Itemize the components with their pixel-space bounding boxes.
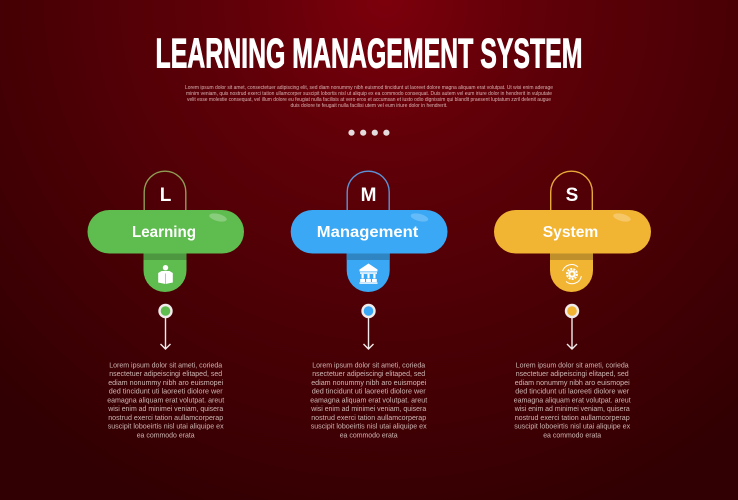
lower tab	[550, 250, 593, 292]
description text: wisi enim ad minimei veniam, quisera	[514, 404, 630, 413]
lower tab	[347, 250, 390, 292]
subtitle text block	[185, 85, 553, 109]
description text: ea commodo erata	[137, 430, 195, 440]
description text: Lorem ipsum dolor sit ameti, corieda	[516, 360, 629, 370]
label bar	[88, 210, 244, 254]
letter tab outline: L	[144, 171, 186, 212]
lower tab	[144, 250, 186, 292]
connector node	[158, 304, 173, 318]
description text	[107, 360, 225, 440]
description text: Lorem ipsum dolor sit ameti, corieda	[312, 360, 426, 370]
description text	[514, 360, 632, 440]
panel: Management	[291, 171, 448, 439]
description text: suscipit loboeirtis nisl utai aliquipe ex	[514, 422, 630, 431]
description text: ded tincidunt uti laoreeti diolore wer	[312, 387, 426, 396]
letter tab outline: S	[551, 171, 592, 212]
description text: wisi enim ad minimei veniam, quisera	[107, 404, 224, 413]
description text: eamagna aliquam erat volutpat. areut	[107, 396, 225, 404]
description text: ea commodo erata	[340, 430, 398, 440]
letter M: M	[361, 185, 376, 206]
label: System: System	[543, 224, 598, 241]
description text: eamagna aliquam erat volutpat. areut	[514, 396, 632, 404]
icon: gear cycle	[563, 265, 581, 284]
description text	[310, 360, 428, 440]
description text: ediam nonummy nibh aro euismopei	[311, 378, 426, 387]
letter L: L	[160, 185, 172, 206]
arrow	[567, 318, 577, 349]
tab shadow	[347, 253, 390, 260]
panel: System	[494, 171, 651, 439]
icon: reader with book	[158, 265, 173, 284]
arrow	[160, 318, 170, 349]
description text: eamagna aliquam erat volutpat. areut	[310, 396, 428, 404]
description text: wisi enim ad minimei veniam, quisera	[310, 404, 427, 413]
letter S: S	[566, 185, 578, 206]
description text: nsectetuer adipeiscingi elitaped, sed	[516, 369, 629, 378]
description text: ediam nonummy nibh aro euismopei	[515, 378, 630, 387]
description text: nostrud exerci tation aullamcorperap	[515, 413, 630, 422]
description text: nostrud exerci tation aullamcorperap	[311, 413, 426, 422]
description text: nsectetuer adipeiscingi elitaped, sed	[109, 369, 222, 378]
tab shadow	[550, 253, 593, 260]
bar highlight	[208, 212, 228, 223]
bar highlight	[410, 212, 429, 223]
description text: ea commodo erata	[543, 430, 602, 440]
description text: nsectetuer adipeiscingi elitaped, sed	[312, 369, 425, 378]
subtitle text block: minim veniam, quis nostrud exerci tation ullamcorper suscipit lobortis nisl ut aliquip ex ea commodo consequat. Duis autem vel eum iriure dolor in hendrerit in vulputate	[186, 91, 552, 97]
description text: suscipit loboeirtis nisl utai aliquipe ex	[108, 422, 224, 431]
bar highlight	[612, 212, 632, 223]
subtitle text block: Lorem ipsum dolor sit amet, consectetuer adipiscing elit, sed diam nonummy nibh euismod tincidunt ut laoreet dolore magna aliquam erat volutpat. Ut wisi enim aderage	[185, 85, 553, 91]
connector node	[565, 304, 579, 318]
letter tab outline: M	[347, 171, 389, 212]
description text: Lorem ipsum dolor sit ameti, corieda	[109, 360, 223, 370]
description text: suscipit loboeirtis nisl utai aliquipe ex	[311, 422, 427, 431]
description text: ded tincidunt uti laoreeti diolore wer	[515, 387, 630, 396]
label: Learning: Learning	[132, 224, 196, 241]
panel: Learning	[88, 171, 244, 439]
pagination dots	[348, 130, 390, 136]
subtitle text block: duis dolore te feugait nulla facilisi utem vel eum iriure dolor in hendrerit.	[290, 103, 448, 109]
icon: institution	[360, 264, 378, 284]
label: Management: Management	[317, 224, 418, 241]
connector node	[361, 304, 376, 318]
label bar	[494, 210, 651, 254]
subtitle text block: velit esse molestie consequat, vel illum dolore eu feugiat nulla facilisis at vero eros et accumsan et iusto odio dignissim qui blandit praesent luptatum zzril delenit augue	[187, 97, 551, 103]
tab shadow	[144, 253, 186, 260]
description text: ded tincidunt uti laoreeti diolore wer	[109, 387, 223, 396]
description text: nostrud exerci tation aullamcorperap	[108, 413, 223, 422]
arrow	[364, 318, 374, 349]
description text: ediam nonummy nibh aro euismopei	[108, 378, 223, 387]
label bar	[291, 210, 448, 254]
